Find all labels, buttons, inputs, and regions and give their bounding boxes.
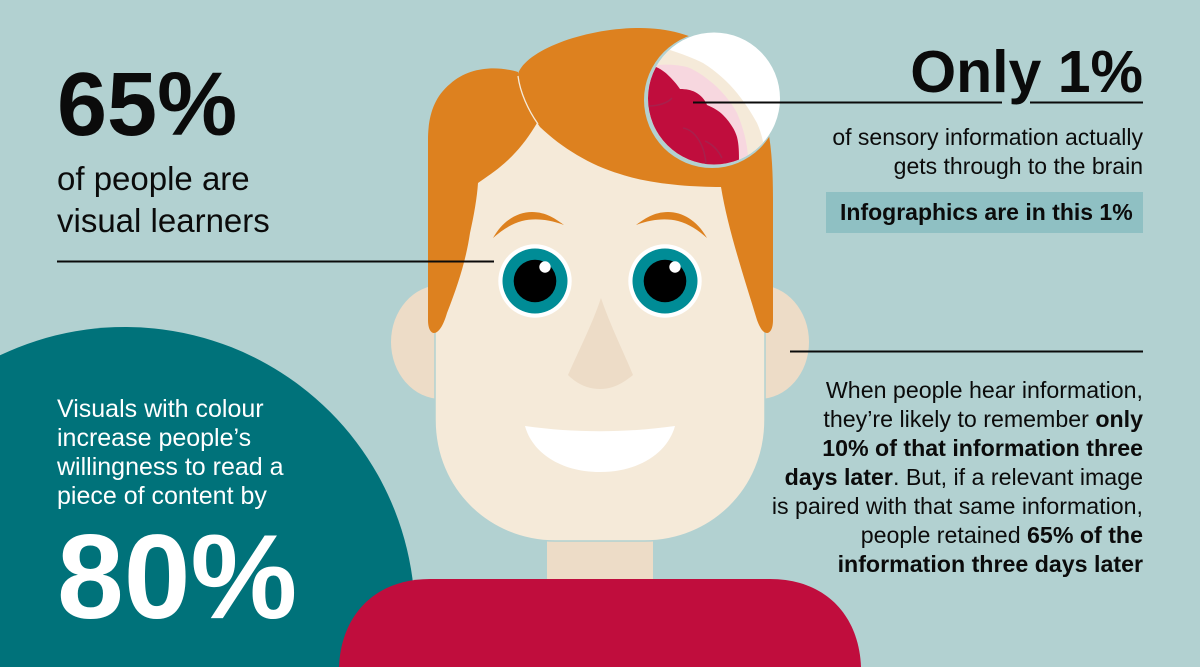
shirt: [339, 579, 861, 667]
stat: only 1%: [826, 39, 1143, 233]
ears: [391, 285, 809, 399]
caption: willingness to read a: [57, 453, 284, 481]
face: [435, 120, 765, 541]
heading only 1%: Only 1%: [910, 39, 1143, 105]
callout: image retention: 10% of that information three: [822, 435, 1143, 461]
eyebrows: [493, 212, 707, 238]
leader lines: [57, 102, 1143, 352]
callout: image retention: days later. But, if a relevant image: [785, 464, 1143, 490]
highlight box: [826, 192, 1143, 233]
callout: image retention: information three days later: [838, 551, 1143, 577]
caption: [832, 124, 1143, 179]
eyes: [498, 244, 702, 318]
caption: piece of content by: [57, 482, 267, 510]
caption: gets through to the brain: [894, 152, 1143, 178]
mouth: [525, 426, 675, 472]
big number 80%: 80%: [57, 510, 297, 644]
caption: [57, 395, 284, 510]
callout: image retention: people retained 65% of the: [861, 522, 1143, 548]
caption: [57, 160, 270, 238]
callout: image retention: is paired with that same information,: [772, 493, 1143, 519]
hair: [428, 28, 773, 333]
caption: visual learners: [57, 202, 270, 238]
caption: Visuals with colour: [57, 395, 264, 423]
teal circle panel: [0, 327, 415, 667]
neck: [547, 520, 653, 600]
stat: colour 80%: [57, 395, 297, 644]
nose: [568, 298, 633, 389]
stat: 65% visual learners: [57, 55, 270, 238]
highlight box: Infographics are in this 1%: [840, 199, 1133, 225]
callout: image retention: [772, 377, 1143, 577]
caption: increase people’s: [57, 424, 251, 452]
caption: of people are: [57, 160, 250, 197]
big number 65%: 65%: [57, 55, 237, 155]
callout: image retention: they’re likely to remember only: [823, 406, 1143, 432]
callout: image retention: When people hear information,: [826, 377, 1143, 403]
brain cutaway circle: [644, 32, 780, 168]
caption: of sensory information actually: [832, 124, 1143, 150]
